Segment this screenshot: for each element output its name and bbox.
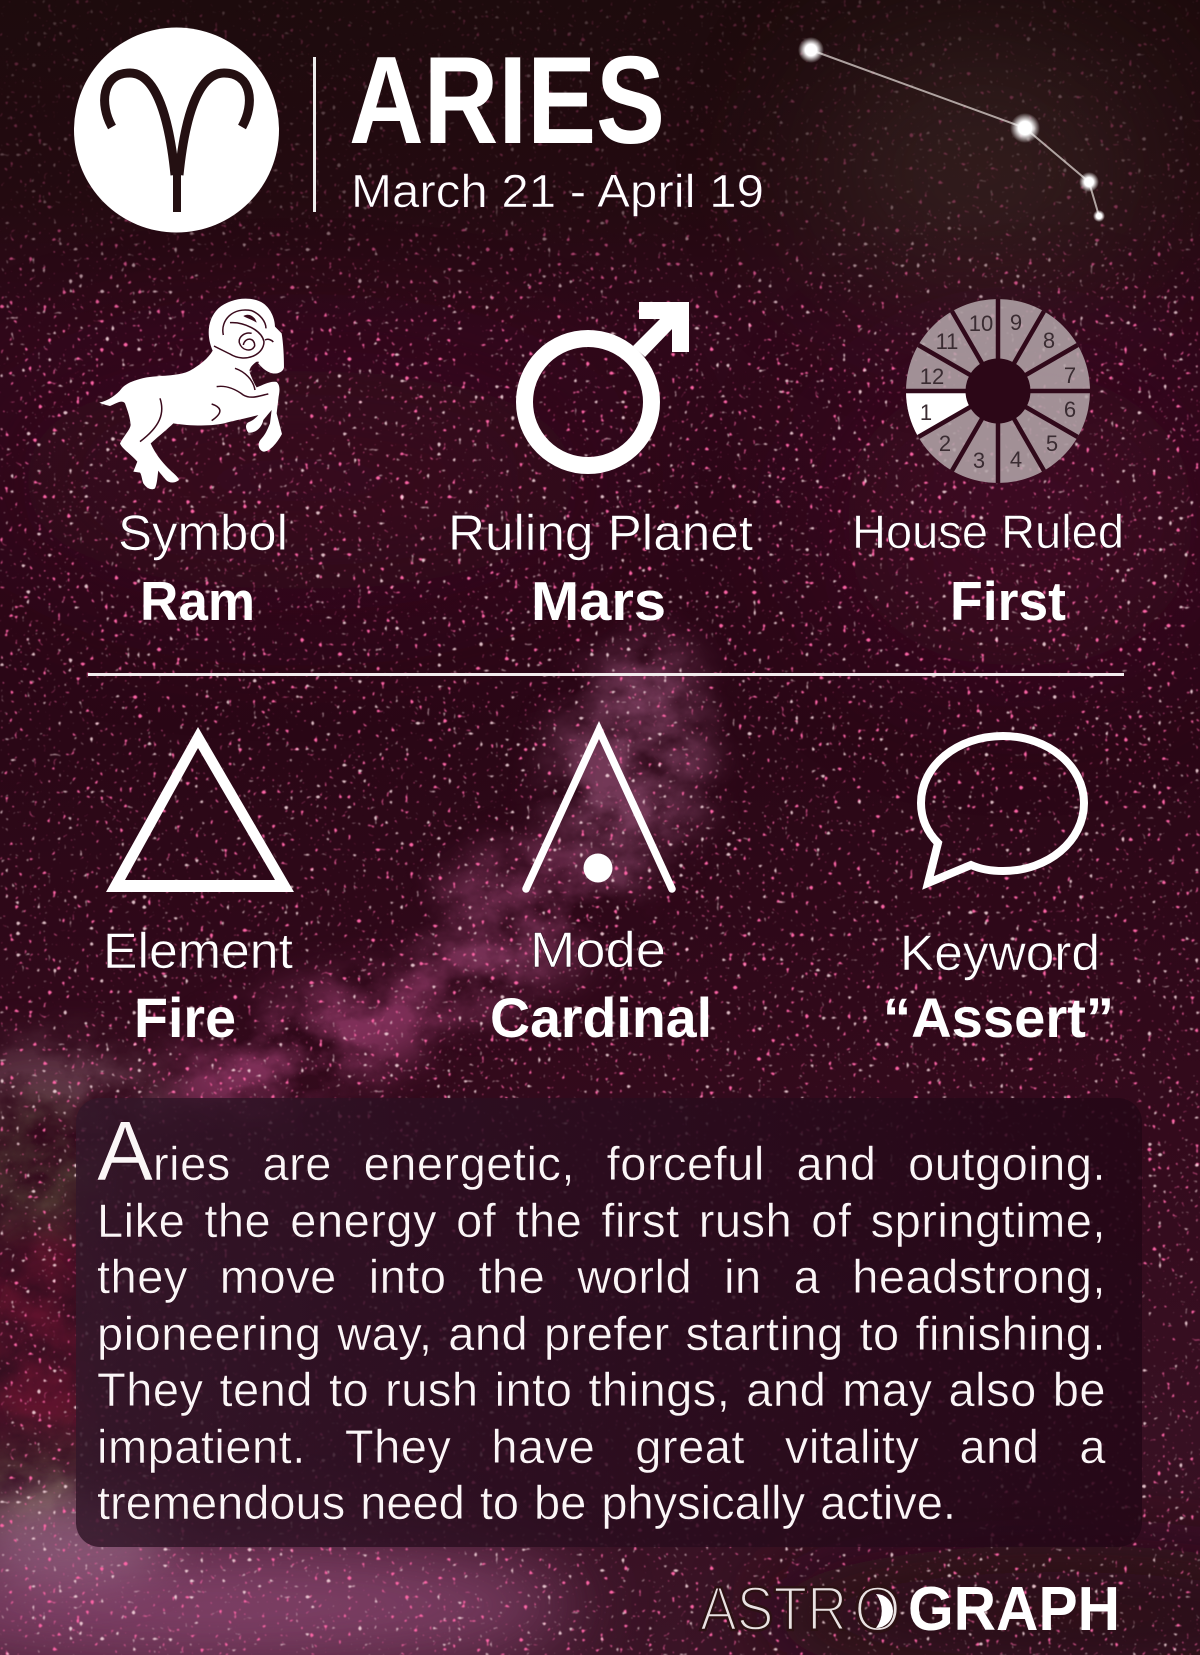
logo	[700, 1573, 1120, 1645]
date range: March 21 - April 19	[351, 165, 764, 217]
constellation	[798, 37, 1105, 222]
panel: house ruled	[852, 299, 1124, 632]
title: ARIES	[349, 32, 665, 170]
value: Cardinal	[490, 986, 712, 1049]
icon: house wheel: 4	[1010, 447, 1022, 472]
icon: house wheel: 8	[1043, 328, 1055, 353]
description text: tremendous need to be physically active.	[97, 1476, 956, 1529]
icon: house wheel: 3	[973, 448, 985, 473]
description panel background	[76, 1098, 1142, 1547]
panel: ruling planet	[448, 302, 753, 632]
icon: house wheel: 5	[1046, 431, 1058, 456]
label: Element	[103, 923, 293, 979]
icon: house wheel: 9	[1010, 310, 1022, 335]
logo: GRAPH	[908, 1575, 1120, 1644]
label: Symbol	[118, 505, 288, 561]
icon: ram	[99, 299, 284, 489]
description text: Like the energy of the first rush of springtime,	[97, 1194, 1106, 1247]
icon: house wheel: 11	[936, 329, 958, 354]
label: Keyword	[900, 925, 1100, 981]
value: First	[950, 570, 1066, 632]
panel: mode	[490, 730, 712, 1049]
icon: house wheel	[906, 299, 1090, 483]
icon: mars	[524, 302, 689, 466]
icon: house wheel: 7	[1064, 363, 1076, 388]
description text: impatient. They have great vitality and a	[97, 1420, 1106, 1473]
label: Ruling Planet	[448, 505, 753, 561]
icon: house wheel: 12	[920, 364, 944, 389]
icon: aries glyph badge	[74, 28, 279, 232]
description text: they move into the world in a headstrong,	[97, 1250, 1106, 1303]
icon: cardinal mode	[526, 730, 672, 889]
icon: house wheel: 2	[939, 431, 951, 456]
icon: fire triangle	[106, 727, 294, 892]
description text: pioneering way, and prefer starting to finishing.	[97, 1307, 1106, 1360]
label: House Ruled	[852, 505, 1124, 558]
logo: O	[854, 1573, 901, 1645]
panel: keyword	[883, 736, 1114, 1049]
value: Fire	[134, 986, 236, 1049]
icon: house wheel: 10	[969, 311, 993, 336]
header divider	[313, 57, 316, 212]
panel: element	[103, 727, 294, 1049]
description text: Aries are energetic, forceful and outgoing.	[97, 1104, 1106, 1198]
description text: They tend to rush into things, and may also be	[97, 1363, 1106, 1416]
value: Mars	[531, 570, 666, 632]
label: Mode	[530, 922, 666, 978]
icon: house wheel: 6	[1064, 397, 1076, 422]
value: Ram	[140, 570, 255, 632]
value: “Assert”	[883, 986, 1114, 1049]
section divider	[88, 673, 1124, 676]
icon: house wheel: 1	[920, 400, 932, 425]
logo: ASTR	[700, 1575, 847, 1644]
panel: symbol	[99, 299, 288, 632]
icon: speech bubble	[921, 736, 1084, 883]
